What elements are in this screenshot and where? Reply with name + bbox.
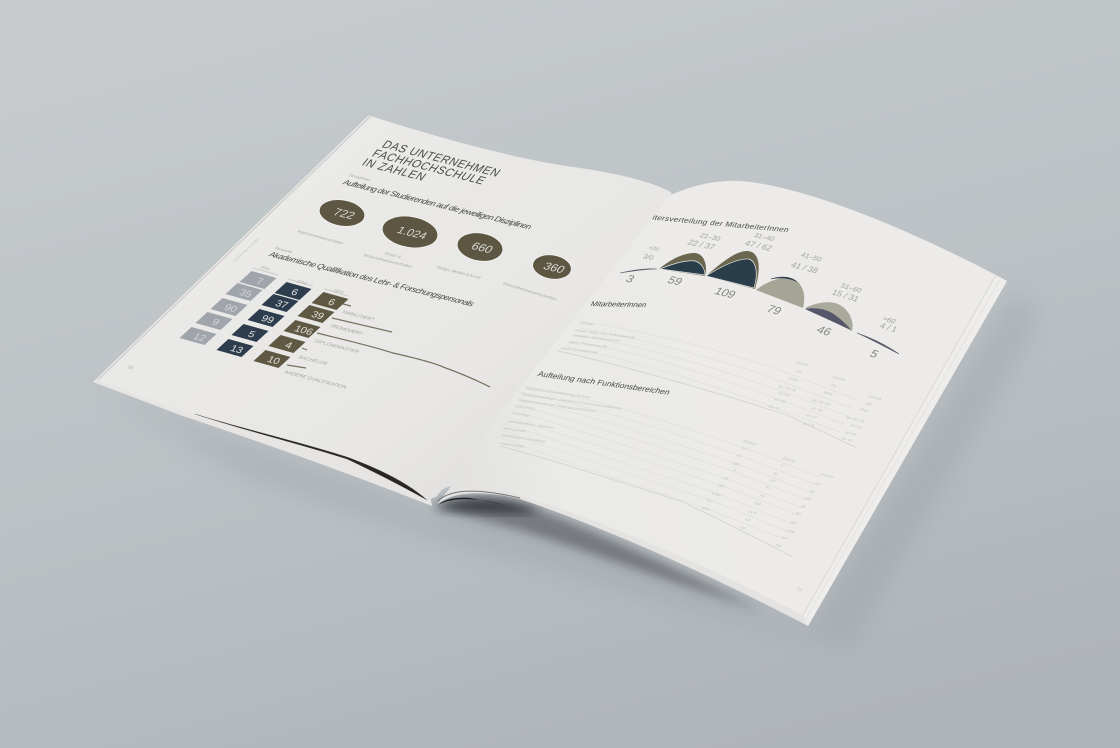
year three values — [265, 298, 337, 367]
left page side edge — [98, 116, 371, 380]
function table: 1.190 — [784, 529, 795, 534]
right page — [436, 181, 1007, 626]
page number right: 39 — [795, 587, 804, 593]
function table: 1.150 — [710, 492, 721, 497]
function table: 80 — [795, 512, 801, 516]
staff table: 55 / 72 / 34 — [777, 385, 797, 392]
page stack — [93, 115, 1007, 626]
function table: 20 — [772, 472, 778, 476]
year labels: 14/15 — [332, 288, 346, 294]
age labels: >60 — [881, 314, 898, 325]
staff table: Lehrende u. Mitarbeitende (%) — [571, 334, 620, 343]
age labels: 47 / 62 — [743, 238, 774, 253]
year three tails — [287, 304, 490, 387]
year three values: 39 — [309, 310, 326, 322]
staff table: Anteil u. Promovierte (%) — [567, 341, 608, 349]
qualification labels: HABILITIERT — [341, 310, 375, 323]
age labels: 4 / 1 — [878, 321, 900, 334]
age labels: 3/0 — [641, 253, 655, 262]
qualification labels — [283, 310, 375, 390]
year two tiles — [216, 282, 312, 357]
circle: 360: Gesundheitswissenschaften — [501, 281, 559, 301]
function table: 2014/15 — [819, 473, 834, 479]
disciplines heading: Aufteilung der Studierenden auf die jeweiligen Disziplinen — [341, 178, 535, 231]
age labels: 41–50 — [799, 251, 824, 263]
age totals — [623, 273, 882, 361]
age labels: 21–30 — [698, 232, 722, 243]
year two values: 37 — [273, 299, 290, 311]
age totals: 5 — [867, 347, 882, 361]
function table: 41 — [759, 494, 765, 498]
age labels — [641, 231, 900, 334]
function table: 165 — [731, 462, 739, 466]
age bump 31-40 — [706, 251, 759, 289]
staff table: 51 / 40 — [777, 392, 790, 398]
qualification labels: ANDERE QUALIFIKATION — [283, 370, 348, 390]
qualification labels: PROMOVIERT — [329, 324, 363, 337]
book shadow — [93, 290, 1040, 650]
gap shadow under left page — [195, 414, 427, 500]
qualification tile chart — [180, 265, 490, 390]
staff table: 21 / 87 — [840, 437, 853, 443]
function table: 1.170 — [746, 510, 757, 515]
function table: Studiengangsleitungen, Stabstellen & Forschungsprojektleitende — [520, 393, 622, 410]
function table: 350 — [753, 502, 761, 506]
function table: 970 — [738, 526, 746, 530]
year one values: 90 — [222, 303, 239, 315]
year three values: 10 — [265, 355, 282, 367]
circle: 1.024: Wirtschaftswissenschaften — [362, 253, 415, 269]
year labels — [253, 265, 348, 296]
function table: 979 — [701, 507, 709, 511]
staff table: 11 / 76 — [802, 422, 815, 428]
function table: 40 — [722, 477, 728, 481]
year two values: 99 — [259, 314, 276, 326]
circle: 660: 660 — [469, 240, 496, 256]
function table: 59 — [809, 490, 815, 494]
age bump under 20 — [620, 269, 657, 273]
function table: Gesamt (Köpfe) — [498, 442, 525, 448]
circle: 722: Ingenieurwissenschaften — [296, 229, 346, 246]
function table: 74 — [735, 454, 741, 458]
function table: 978 — [774, 544, 782, 548]
function table: 3,7 — [814, 482, 821, 486]
title: IN ZAHLEN — [359, 156, 429, 183]
title: DAS UNTERNEHMEN — [379, 138, 504, 179]
age bump 41-50 — [756, 277, 804, 308]
year two values: 6 — [289, 288, 300, 298]
staff table: 50 / 82 — [844, 431, 857, 437]
function table: 180 — [716, 484, 724, 488]
staff table: 41 / 83 — [810, 407, 823, 413]
age totals: 109 — [712, 285, 738, 301]
qualification labels: BACHELOR — [297, 355, 329, 367]
staff table: 2013/14 — [831, 376, 846, 382]
age totals: 79 — [764, 303, 784, 317]
right page edge band — [803, 275, 1007, 626]
circle: 1.024: 1.024 — [394, 225, 429, 242]
staff table: 55 / 44 — [849, 424, 862, 430]
function table: Administration & Verwaltung — [500, 434, 546, 443]
age distribution heading: Altersverteilung der MitarbeiterInnen — [645, 213, 790, 234]
qualification labels: DIPLOM/MASTER — [313, 339, 360, 355]
circle: 360: 360 — [541, 260, 568, 276]
qualification heading: Akademische Qualifikation des Lehr- & Forschungspersonals — [267, 250, 477, 308]
function table: 5,5 — [781, 536, 788, 540]
staff table: 291 — [829, 384, 837, 388]
year three values: 4 — [283, 341, 294, 351]
side label: Hochschule in Zahlen — [233, 237, 260, 263]
year one values: 9 — [210, 318, 221, 328]
staff table: 2014/15 — [867, 395, 882, 401]
function table: Studienassistenten bzw. Studiengangsassistenten — [517, 399, 597, 413]
staff table heading: MitarbeiterInnen — [589, 300, 648, 309]
year three values: 6 — [326, 298, 337, 308]
function table — [498, 386, 834, 557]
year two values — [228, 288, 300, 356]
function table: 70 — [764, 486, 770, 490]
age totals: 3 — [623, 273, 637, 286]
year labels: 12/14 — [295, 279, 309, 285]
function table: 2013/14 — [781, 457, 796, 463]
function table: 2012/13 — [742, 440, 757, 446]
age bump 21-30 — [659, 253, 706, 276]
age totals: 46 — [814, 323, 835, 339]
function table: 169 — [803, 497, 811, 501]
page number left: 38 — [126, 365, 135, 371]
circle: 722: 722 — [331, 206, 358, 222]
year labels: 10/11 — [259, 265, 272, 271]
circle: 360 — [501, 252, 573, 301]
function table: 4,7 — [706, 499, 713, 503]
qualification overline: Personal — [273, 246, 294, 254]
year three tiles — [254, 292, 348, 368]
staff table: 302 — [864, 402, 872, 406]
function table: Internationales — [502, 427, 528, 433]
function table: 3,7 — [740, 447, 747, 451]
function table: Akademische Geschäftsführung, Rektorat — [524, 387, 591, 399]
age labels: 31–40 — [752, 231, 777, 243]
function table: 9 — [732, 469, 737, 472]
age distribution chart — [620, 231, 900, 361]
staff table: 273,5 — [787, 377, 798, 382]
circle: 722 — [296, 197, 367, 246]
age labels: <20 — [647, 246, 660, 253]
year one values — [191, 277, 265, 344]
circle: 1.024: Sozial- & — [383, 251, 403, 259]
function table: Studienberatung u. Bibliothek — [506, 420, 554, 429]
staff table: 2012/13 — [794, 361, 809, 367]
staff table: 58 / 80 / 78 — [845, 416, 865, 423]
age labels: 22 / 37 — [686, 238, 717, 251]
age totals: 59 — [665, 274, 685, 288]
staff table: 41 / 65 — [773, 398, 786, 404]
year two values: 5 — [246, 330, 257, 340]
disciplines overline: Disziplinen — [347, 173, 372, 182]
year one values: 7 — [254, 277, 265, 287]
circle: 1.024 — [362, 212, 440, 269]
age bump 51-60 — [805, 302, 853, 331]
staff table: 279 — [794, 370, 802, 374]
year one values: 12 — [191, 332, 208, 344]
year three values: 106 — [292, 324, 315, 338]
age labels: 51–60 — [839, 281, 864, 295]
function table: 3,7 — [779, 464, 786, 468]
age bump over 60 — [857, 333, 899, 354]
function table: Lehre (FTE) — [514, 405, 535, 411]
staff table: 284,8 — [822, 391, 833, 396]
circle: 660: Design, Medien & Kunst — [435, 265, 483, 280]
year two values: 13 — [228, 344, 245, 356]
circle: 660 — [435, 230, 505, 280]
age labels: 41 / 38 — [789, 260, 820, 275]
staff table: 24 / 75 — [767, 405, 780, 411]
function table: 4,8 — [744, 518, 751, 522]
staff table — [558, 321, 882, 448]
year one tiles — [180, 271, 276, 345]
staff table: Gesamt: Senior Lehr., Professoren (%) — [573, 329, 635, 339]
staff table: 293,8 — [858, 408, 869, 413]
function table: 990 — [789, 521, 797, 525]
left page — [98, 116, 672, 500]
staff table: 56 / 35 / 54 — [811, 399, 831, 406]
function table: 81 — [800, 505, 806, 509]
discipline circles — [296, 197, 573, 301]
title: FACHHOCHSCHULE — [369, 147, 489, 187]
staff table: Anteil u. im Ausland (%) — [559, 347, 598, 354]
function table: Forschung — [511, 412, 530, 417]
function table heading: Aufteilung nach Funktionsbereichen — [536, 370, 672, 397]
function table: 160 — [768, 479, 776, 483]
year one values: 35 — [237, 288, 254, 300]
age labels: 15 / 31 — [830, 288, 861, 304]
staff table: 51 / 57 — [805, 414, 818, 420]
staff table: Gesamt — [579, 321, 594, 326]
